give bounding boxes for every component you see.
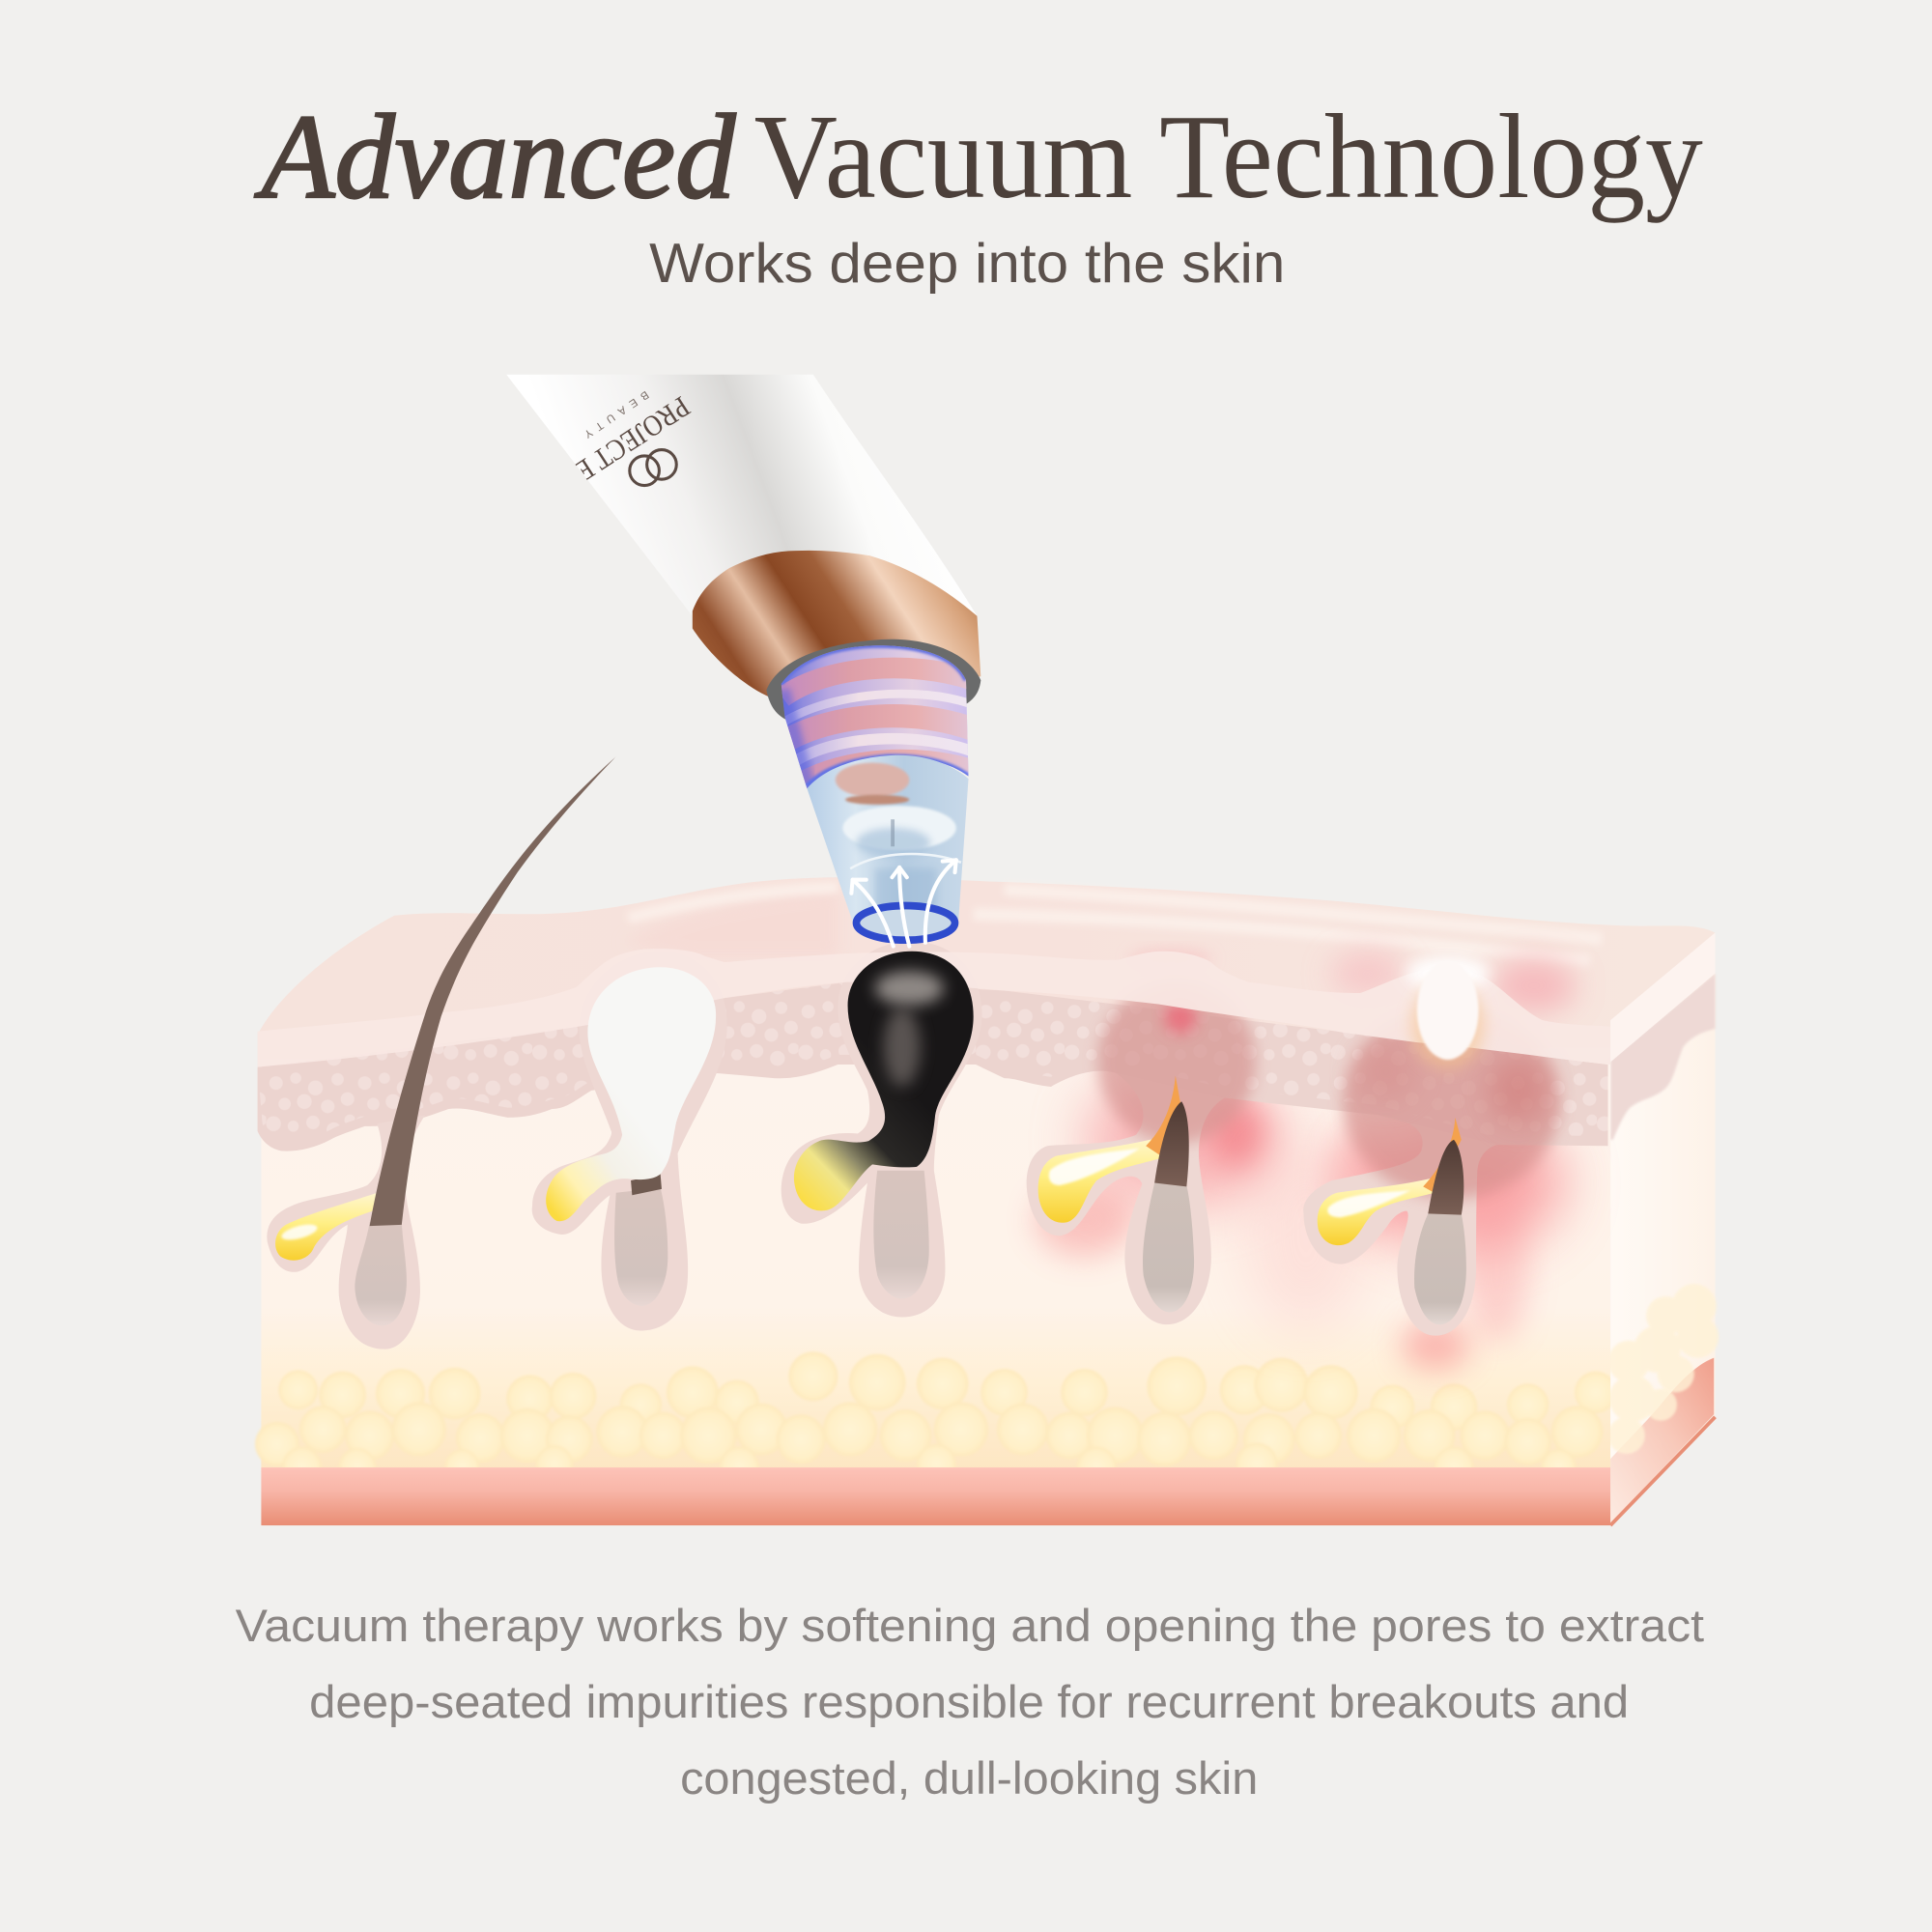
skin cross-section illustration [255, 756, 1719, 1525]
blackhead plug with gland [794, 952, 974, 1210]
right side face [1608, 933, 1719, 1525]
subtitle: Works deep into the skin [649, 233, 1285, 295]
brand logo: PROJECT E [569, 390, 696, 488]
description text: congested, dull-looking skin [680, 1753, 1258, 1804]
follicle 3: blackhead [794, 952, 974, 1299]
inflamed domes [1097, 980, 1560, 1199]
device body [506, 375, 977, 616]
skin top surface [258, 877, 1716, 1060]
brand logo: BEAUTY [577, 388, 650, 443]
red inflammation glow [1035, 1072, 1565, 1370]
hair stub [1154, 1101, 1189, 1186]
front dermis and fat background [261, 1060, 1610, 1472]
fat cells layer [254, 1350, 1610, 1467]
follicle outlines [267, 941, 1497, 1350]
hair shaft [370, 756, 616, 1226]
title: Advanced [254, 91, 736, 224]
title [254, 91, 1703, 224]
follicle 4: inflamed pimple [1038, 1076, 1194, 1312]
dermis dotted layer [258, 982, 1608, 1151]
hair stub [1428, 1140, 1463, 1215]
grey ring [766, 639, 980, 721]
follicle 1: healthy hair follicle [275, 756, 616, 1325]
copper band [693, 551, 980, 697]
white pustule head [1406, 956, 1490, 1069]
blue rim [856, 906, 955, 940]
tip collar [781, 645, 974, 788]
clear tip [807, 755, 969, 941]
epidermis band [258, 949, 1610, 1067]
vacuum device [506, 375, 980, 947]
description text: Vacuum therapy works by softening and opening the pores to extract [236, 1601, 1704, 1652]
suction arrows [851, 860, 956, 947]
description text: deep-seated impurities responsible for recurrent breakouts and [309, 1677, 1629, 1728]
follicle 5: pustule [1318, 1118, 1466, 1324]
title: Vacuum Technology [754, 91, 1703, 224]
white plug with sebaceous gland [546, 967, 716, 1221]
base tissue layer [261, 1467, 1610, 1525]
description text [236, 1601, 1704, 1804]
follicle 2: whitehead [546, 967, 716, 1306]
